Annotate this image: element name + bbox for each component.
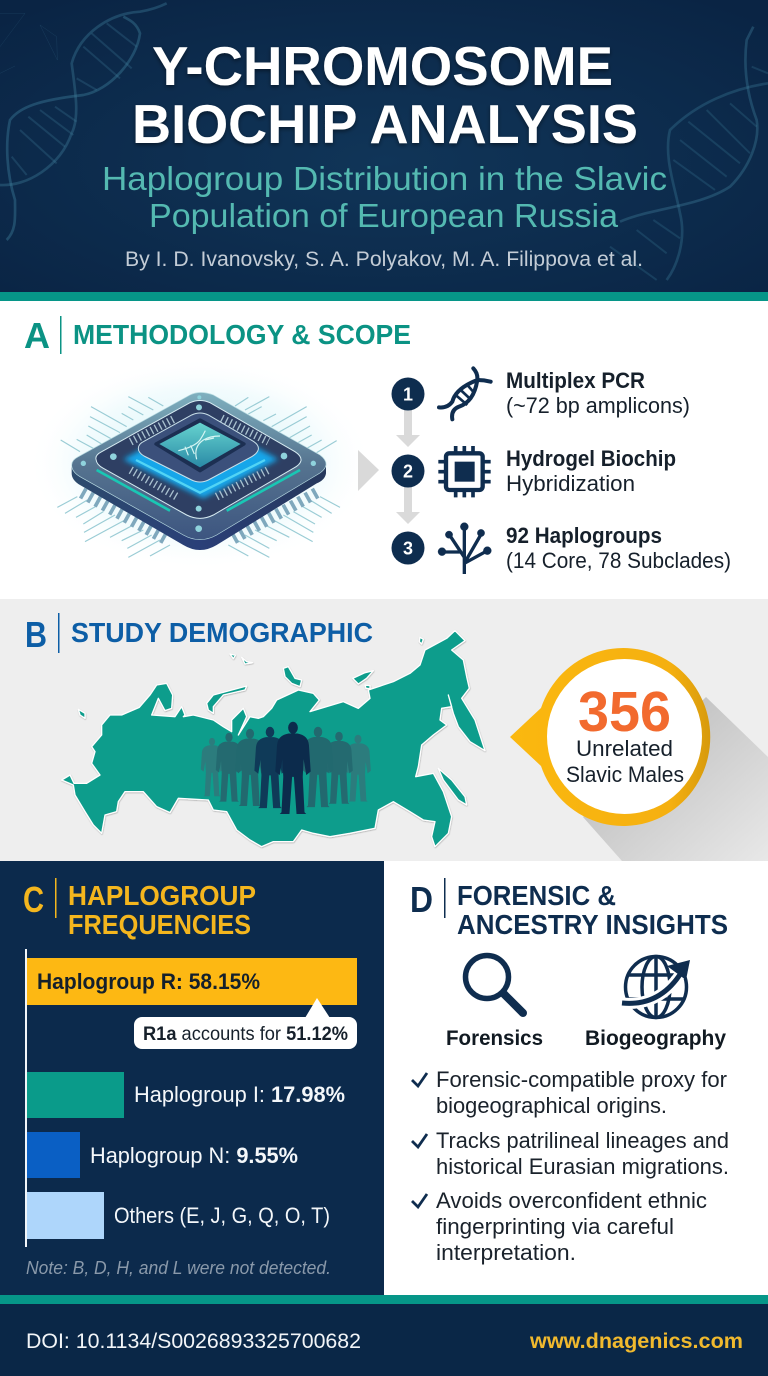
bullet 3: Avoids overconfident ethnic [436,1188,707,1213]
icon: right DNA helix background [610,27,768,280]
illustration: biochip [27,357,373,570]
step 1 text: Multiplex PCR [506,368,645,393]
panel: footer [0,1295,768,1376]
callout: 356 unrelated Slavic males: 356 [578,680,671,744]
step 1 text: (~72 bp amplicons) [506,393,690,418]
note: Note: B, D, H, and L were not detected. [26,1258,331,1278]
bar: others [27,1192,330,1239]
arrow: chip to steps [358,450,379,491]
callout: R1a share: R1a accounts for 51.12% [143,1023,348,1045]
heading: forensic and ancestry insights: ANCESTRY INSIGHTS [457,909,728,940]
authors: By I. D. Ivanovsky, S. A. Polyakov, M. A. Filippova et al. [125,248,643,271]
section letter C: C [23,879,44,920]
bar: haplogroup R: Haplogroup R: 58.15% [37,969,260,994]
people silhouettes [201,722,371,814]
heading: haplogroup frequencies [68,880,256,940]
callout: 356 unrelated Slavic males [510,648,768,861]
step 3 [392,523,731,574]
website: www.dnagenics.com [529,1330,743,1353]
section letter A: A [24,315,50,356]
bullet 1: Forensic-compatible proxy for [436,1067,727,1092]
step 2 text [506,446,676,496]
bar chart [25,949,357,1247]
panel: C haplogroup frequencies [0,861,384,1295]
step 3 text: (14 Core, 78 Subclades) [506,548,731,573]
subtitle: Haplogroup Distribution in the Slavic [102,160,667,197]
number badge 2: 2 [403,462,413,482]
bar: haplogroup N [27,1132,298,1178]
bullet 3 [412,1188,707,1265]
bullet 2 [412,1128,729,1179]
number badge 3 [392,532,424,564]
bar: haplogroup N: Haplogroup N: 9.55% [90,1143,298,1168]
number badge 3: 3 [403,538,413,558]
flow arrow 2 to 3 [396,487,420,524]
heading: haplogroup frequencies: HAPLOGROUP [68,880,256,911]
title: Y-CHROMOSOME [152,35,613,97]
icon: chip [438,446,491,497]
bullet 1 [412,1067,727,1118]
map of Russia [62,631,485,847]
step 1 text [506,368,690,418]
panel: A methodology and scope [0,301,768,599]
panel: D forensic and ancestry insights [385,861,768,1295]
subtitle: Population of European Russia [149,197,619,234]
section letter D: D [410,879,433,920]
bar: haplogroup I [27,1072,345,1118]
callout: R1a share [134,998,357,1049]
callout: 356 unrelated Slavic males: Unrelated [576,736,673,761]
icon: globe with arrow [622,956,690,1018]
label: biogeography: Biogeography [585,1027,726,1050]
DOI: DOI: 10.1134/S0026893325700682 [26,1330,361,1353]
step 2 text: Hydrogel Biochip [506,446,676,471]
icon: DNA [439,368,491,419]
bar: haplogroup I: Haplogroup I: 17.98% [134,1082,345,1107]
bullet 3: interpretation. [436,1240,576,1265]
bullet 1: biogeographical origins. [436,1093,667,1118]
icon: branching tree [438,523,491,574]
bullet 2: Tracks patrilineal lineages and [436,1128,729,1153]
icon: magnifying glass [466,956,523,1013]
bar: others: Others (E, J, G, Q, O, T) [114,1203,330,1228]
heading: forensic and ancestry insights: FORENSIC & [457,880,616,911]
title [132,35,638,155]
number badge 1 [392,378,424,410]
step 2 [392,446,676,497]
heading: study demographic: STUDY DEMOGRAPHIC [71,617,373,648]
heading: forensic and ancestry insights [457,880,728,940]
label: forensics: Forensics [446,1027,543,1050]
number badge 1: 1 [403,384,413,404]
bar: haplogroup R [27,958,357,1005]
icon: left DNA helix background [0,3,167,240]
flow arrow 1 to 2 [396,410,420,447]
step 1 [392,368,690,419]
step 2 text: Hybridization [506,471,635,496]
section letter B: B [25,614,47,655]
step 3 text [506,523,731,573]
panel: B study demographic [0,599,768,861]
bullet 2: historical Eurasian migrations. [436,1154,729,1179]
bullet 3: fingerprinting via careful [436,1214,674,1239]
title: BIOCHIP ANALYSIS [132,93,638,155]
subtitle [102,160,667,234]
heading: methodology and scope: METHODOLOGY & SCOPE [73,319,411,350]
number badge 2 [392,454,424,488]
step 3 text: 92 Haplogroups [506,523,662,548]
panel: header [0,0,768,293]
callout: 356 unrelated Slavic males: Slavic Males [566,762,684,787]
heading: haplogroup frequencies: FREQUENCIES [68,909,251,940]
